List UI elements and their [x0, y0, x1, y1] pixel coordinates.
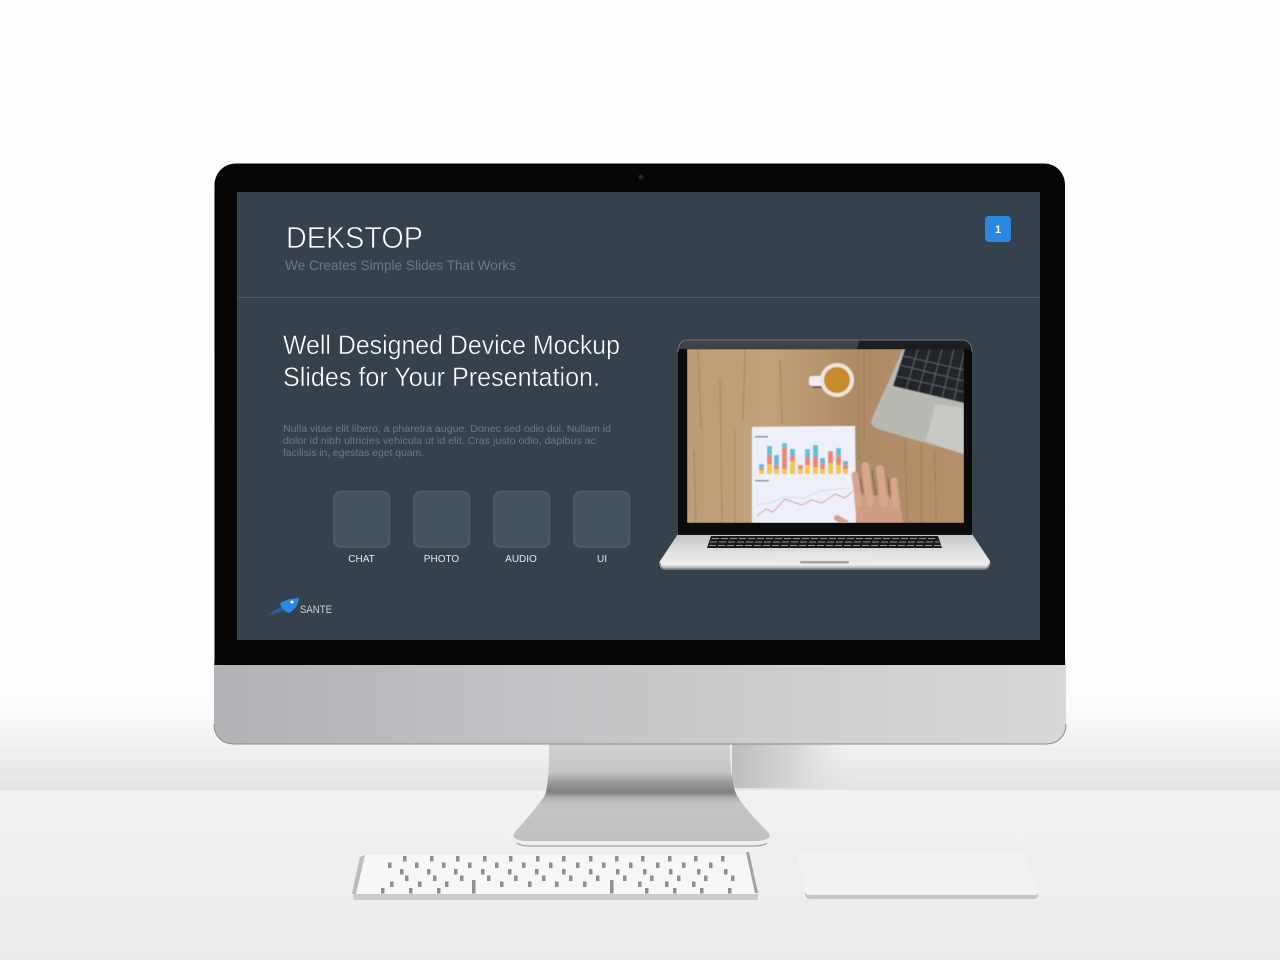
subtitle: We Creates Simple Slides That Works: [285, 257, 516, 273]
page number badge: 1: [995, 224, 1001, 236]
background laptop photo: [871, 349, 964, 454]
coffee cup: [809, 363, 854, 397]
title: DEKSTOP: [286, 220, 423, 255]
tile: audio: [494, 492, 550, 565]
logo: rocket: [267, 598, 299, 616]
laptop screen photo: [687, 349, 964, 523]
tile: photo: [414, 492, 470, 565]
wood grain: [694, 349, 936, 523]
headline: [283, 330, 620, 392]
desk surface: [0, 790, 1280, 960]
page number badge: [985, 216, 1011, 242]
tile: photo: PHOTO: [424, 554, 459, 565]
chart paper photo: [752, 426, 856, 523]
laptop lid: [678, 340, 972, 536]
keyboard key gaps: [381, 856, 734, 894]
logo text: SANTE: [300, 604, 332, 616]
headline: Well Designed Device Mockup: [283, 330, 620, 360]
monitor bezel: [214, 164, 1065, 665]
headline: Slides for Your Presentation.: [283, 362, 600, 392]
body text: dolor id nibh ultricies vehicula ut id elit. Cras justo odio, dapibus ac: [283, 435, 596, 447]
laptop mockup: [659, 340, 990, 569]
monitor: [214, 164, 1066, 744]
laptop keyboard: [707, 536, 942, 548]
slide screen: [237, 192, 1040, 640]
webcam: [638, 174, 644, 180]
header divider: [237, 297, 1040, 298]
body text: [283, 423, 611, 459]
monitor stand: [513, 744, 857, 846]
trackpad: [797, 853, 1038, 899]
tile: chat: CHAT: [348, 554, 375, 565]
tile: audio: AUDIO: [505, 554, 537, 565]
tile: chat: [334, 492, 390, 565]
tile: ui: [574, 492, 630, 565]
monitor chin: [214, 660, 1066, 744]
laptop base: [659, 533, 990, 569]
body text: Nulla vitae elit libero, a pharetra augue. Donec sed odio dui. Nullam id: [283, 423, 611, 435]
body text: facilisis in, egestas eget quam.: [283, 447, 424, 459]
stacked bars: [759, 443, 848, 474]
hand photo: [837, 466, 903, 523]
tile: ui: UI: [597, 554, 607, 565]
keyboard: [352, 852, 758, 900]
